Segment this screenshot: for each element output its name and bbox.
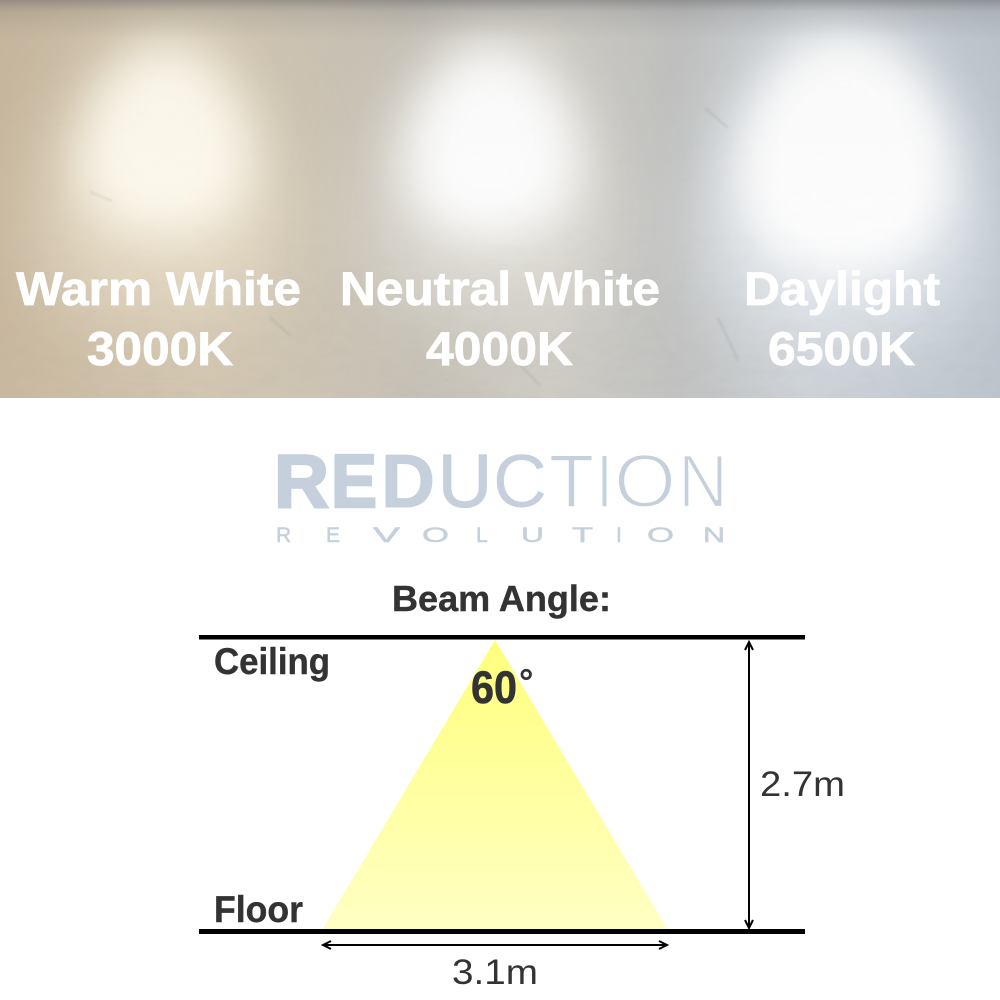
logo word: REVOLUTION: R [276, 524, 291, 547]
logo word: REDUCTION: N [678, 439, 728, 523]
logo word: REVOLUTION: V [373, 524, 400, 547]
ceiling line [199, 635, 805, 640]
height value: 2.7m [760, 765, 845, 804]
logo: Reduction Revolution [274, 439, 728, 547]
logo word: REDUCTION: T [549, 439, 594, 523]
ceiling label: Ceiling [214, 641, 330, 682]
logo word: REDUCTION: D [381, 439, 435, 523]
beam angle value: 60 [471, 662, 517, 713]
label: daylight 6500K: Daylight [744, 262, 940, 315]
logo word: REVOLUTION: E [326, 524, 340, 547]
beam angle value: ° [519, 661, 533, 702]
logo word: REDUCTION: U [438, 439, 492, 523]
logo word: REDUCTION: I [597, 439, 612, 523]
floor label: Floor [214, 889, 303, 930]
label: warm white 3000K [16, 262, 301, 375]
label: neutral white 4000K: 4000K [426, 322, 573, 375]
logo word: REDUCTION: C [493, 439, 547, 523]
label: neutral white 4000K: Neutral White [340, 262, 660, 315]
heading: beam angle: Beam Angle: [392, 578, 611, 619]
warm white light pool [40, 40, 285, 320]
logo word: REVOLUTION [276, 524, 725, 547]
logo word: REVOLUTION: O [647, 524, 674, 547]
wall cracks [90, 108, 738, 385]
logo word: REVOLUTION: N [703, 524, 725, 547]
logo word: REDUCTION [274, 439, 728, 523]
photo panel: lit wall with three colour temperatures [0, 0, 1000, 398]
light beam triangle [322, 640, 668, 930]
logo word: REVOLUTION: I [616, 524, 622, 547]
label: daylight 6500K [744, 262, 940, 375]
logo word: REVOLUTION: U [521, 524, 544, 547]
logo word: REVOLUTION: L [476, 524, 488, 547]
floor line [199, 929, 805, 934]
label: neutral white 4000K [340, 262, 660, 375]
width dimension arrow [323, 941, 667, 949]
daylight light pool [700, 30, 985, 345]
height dimension arrow [745, 642, 753, 928]
label: warm white 3000K: Warm White [16, 262, 301, 315]
logo word: REDUCTION: O [614, 439, 676, 523]
logo word: REVOLUTION: O [422, 524, 449, 547]
neutral white light pool [365, 40, 610, 320]
label: daylight 6500K: 6500K [768, 322, 915, 375]
width value: 3.1m [452, 953, 538, 992]
logo word: REDUCTION: R [274, 439, 329, 523]
label: warm white 3000K: 3000K [87, 322, 233, 375]
logo word: REDUCTION: E [331, 439, 377, 523]
logo word: REVOLUTION: T [572, 524, 593, 547]
